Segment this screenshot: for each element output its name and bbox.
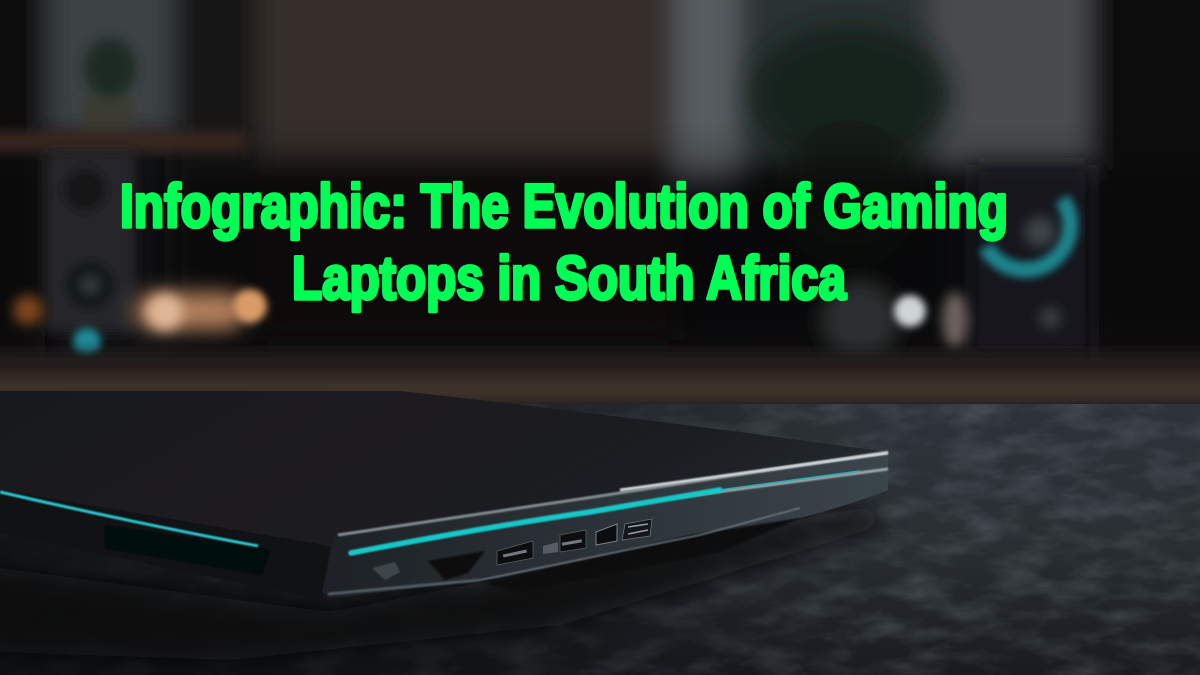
left shelf — [0, 132, 245, 152]
teal light strip, side — [0, 492, 258, 546]
side vents — [105, 525, 270, 575]
left body side — [0, 490, 330, 600]
port: mini display — [596, 524, 617, 545]
ports — [428, 519, 652, 580]
back shelf edge — [0, 352, 1200, 404]
top edge highlight — [338, 452, 888, 535]
left speaker — [45, 152, 135, 332]
dark band behind title — [0, 120, 1200, 370]
blurred room background — [0, 0, 1200, 410]
title line 2: Laptops in South Africa — [292, 244, 847, 312]
left logo mark — [372, 562, 400, 580]
front body — [322, 452, 888, 598]
title line 1: Infographic: The Evolution of Gaming — [120, 172, 1008, 240]
port: USB 2 — [560, 530, 586, 552]
stone desk — [0, 404, 1200, 675]
laptop — [0, 391, 888, 600]
plant pot and lamp glow, right — [820, 280, 900, 360]
teal light strip, front — [351, 490, 720, 553]
right speaker with teal ring — [972, 165, 1092, 355]
title — [120, 172, 1008, 312]
laptop lid — [0, 391, 888, 546]
plant on left shelf — [82, 38, 136, 132]
port: USB 3 — [622, 519, 652, 540]
bottom edge highlight — [328, 580, 480, 594]
laptop shadow — [0, 505, 885, 660]
plant on right — [750, 25, 950, 260]
port: USB 1 — [497, 541, 533, 565]
port: HDMI — [428, 551, 485, 580]
bokeh lights — [13, 289, 968, 356]
